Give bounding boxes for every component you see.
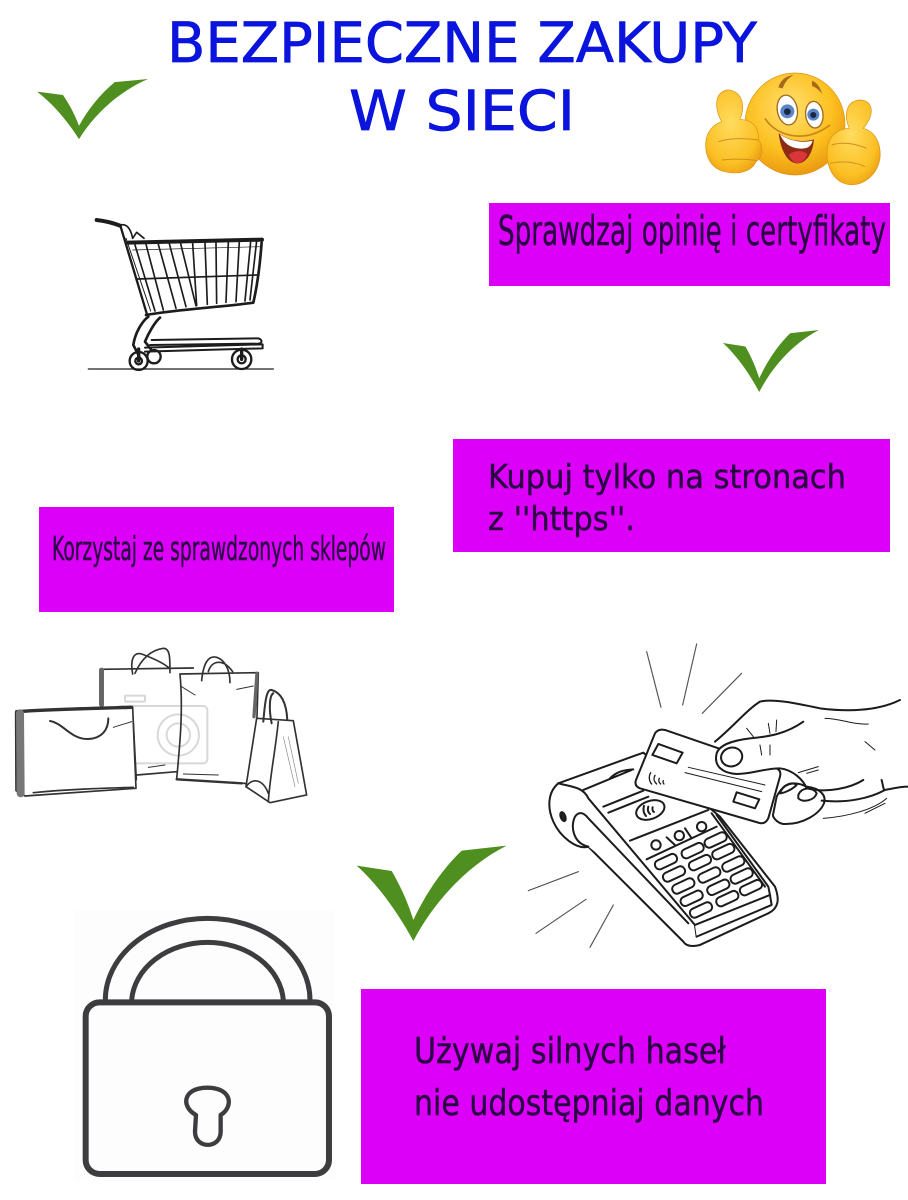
padlock body	[86, 1002, 329, 1174]
tall bag	[177, 657, 258, 784]
impact rays	[528, 644, 742, 947]
panel: https: Kupuj tylko na stronach	[488, 457, 846, 496]
terminal body	[549, 753, 778, 946]
icon: card payment terminal	[528, 644, 908, 947]
title: W SIECI	[349, 79, 575, 143]
cart handle	[97, 220, 151, 313]
panel: strong passwords: Używaj silnych haseł	[414, 1031, 727, 1072]
icon: green check mark right	[723, 330, 819, 392]
watermark camera	[117, 696, 207, 763]
cart wheels	[130, 349, 251, 370]
panel: https	[453, 439, 890, 552]
icon: thumbs up smiley	[706, 73, 880, 185]
panel: strong passwords	[361, 989, 826, 1184]
icon: padlock	[75, 910, 335, 1182]
wide bag	[16, 707, 137, 796]
panel: strong passwords: nie udostępniaj danych	[414, 1083, 764, 1124]
panel: https: z ''https''.	[488, 499, 635, 538]
hand	[715, 700, 908, 818]
panel: verified shops: Korzystaj ze sprawdzonych sklepów	[52, 529, 386, 568]
round buttons	[651, 822, 706, 850]
title	[167, 11, 757, 143]
smile	[765, 118, 830, 163]
left hand	[706, 90, 762, 173]
right hand	[827, 100, 880, 185]
face	[745, 73, 845, 175]
cart frame and shelf	[133, 317, 263, 357]
back bag	[100, 648, 193, 775]
icon: shopping bags	[16, 648, 307, 803]
panel: check reviews	[489, 203, 890, 286]
eyes	[775, 93, 824, 129]
icon: green check mark center	[357, 846, 507, 941]
cart basket	[128, 240, 262, 315]
panel: verified shops	[39, 507, 394, 612]
keypad	[653, 831, 764, 919]
contactless symbol	[633, 797, 667, 823]
hand back fingers	[773, 783, 825, 824]
icon: shopping cart	[88, 220, 273, 370]
ground line	[88, 367, 273, 371]
padlock background	[75, 910, 335, 1182]
terminal slot	[559, 811, 567, 822]
small bag	[246, 690, 307, 803]
keyhole	[186, 1088, 229, 1145]
padlock shackle	[105, 918, 310, 1000]
icon: green check mark top left	[37, 79, 148, 139]
title: BEZPIECZNE ZAKUPY	[167, 11, 757, 75]
bank card	[635, 730, 780, 823]
eyebrows	[778, 75, 822, 94]
